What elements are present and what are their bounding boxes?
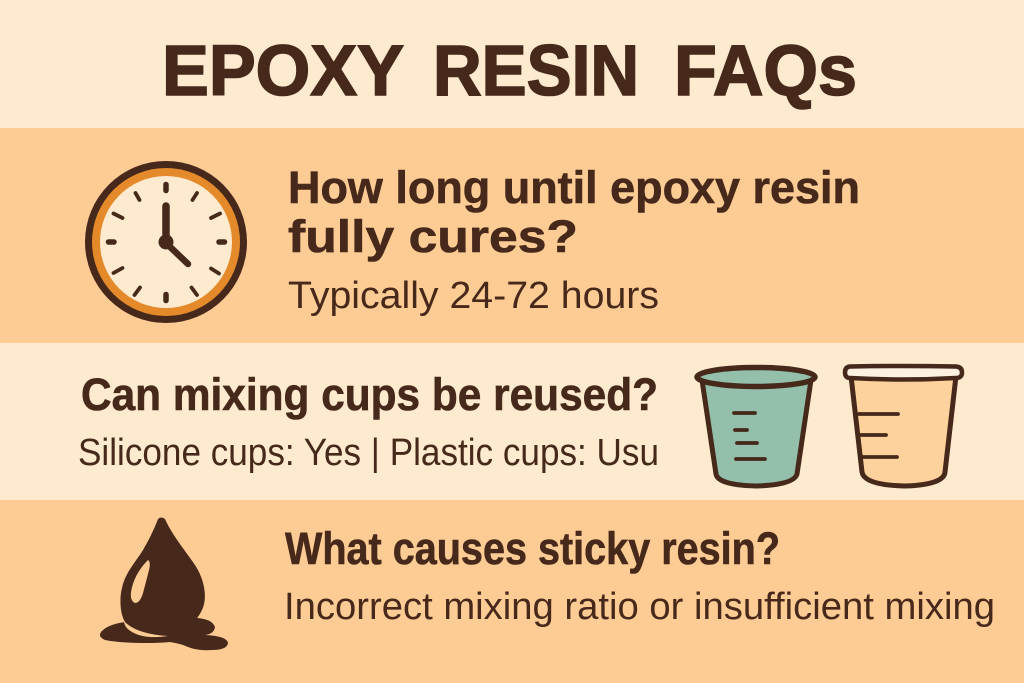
title: RESIN [433, 32, 639, 111]
heading: cure question second line: fully cures? [288, 211, 578, 262]
title: FAQs [674, 32, 857, 111]
icon: green measuring cup [697, 368, 815, 486]
title: EPOXY [162, 32, 404, 111]
icon: clock [85, 161, 247, 323]
heading: cups question: Can mixing cups be reused? [81, 369, 658, 420]
text: cups answer: Silicone cups: Yes | Plastic cups: Usu [78, 432, 659, 474]
title [162, 32, 857, 111]
panel: mixing cups band [0, 343, 1024, 500]
text: sticky answer: Incorrect mixing ratio or insufficient mixing [284, 586, 995, 628]
panel: sticky resin band [0, 500, 1024, 683]
heading: sticky question: What causes sticky resin? [285, 523, 780, 574]
panel: title band [0, 0, 1024, 128]
panel: cure time band [0, 128, 1024, 343]
text: cure answer: Typically 24-72 hours [288, 275, 659, 317]
heading: cure question: How long until epoxy resin [288, 162, 860, 213]
icon: orange measuring cup [845, 366, 962, 486]
icon: resin drop with puddle [100, 518, 228, 650]
